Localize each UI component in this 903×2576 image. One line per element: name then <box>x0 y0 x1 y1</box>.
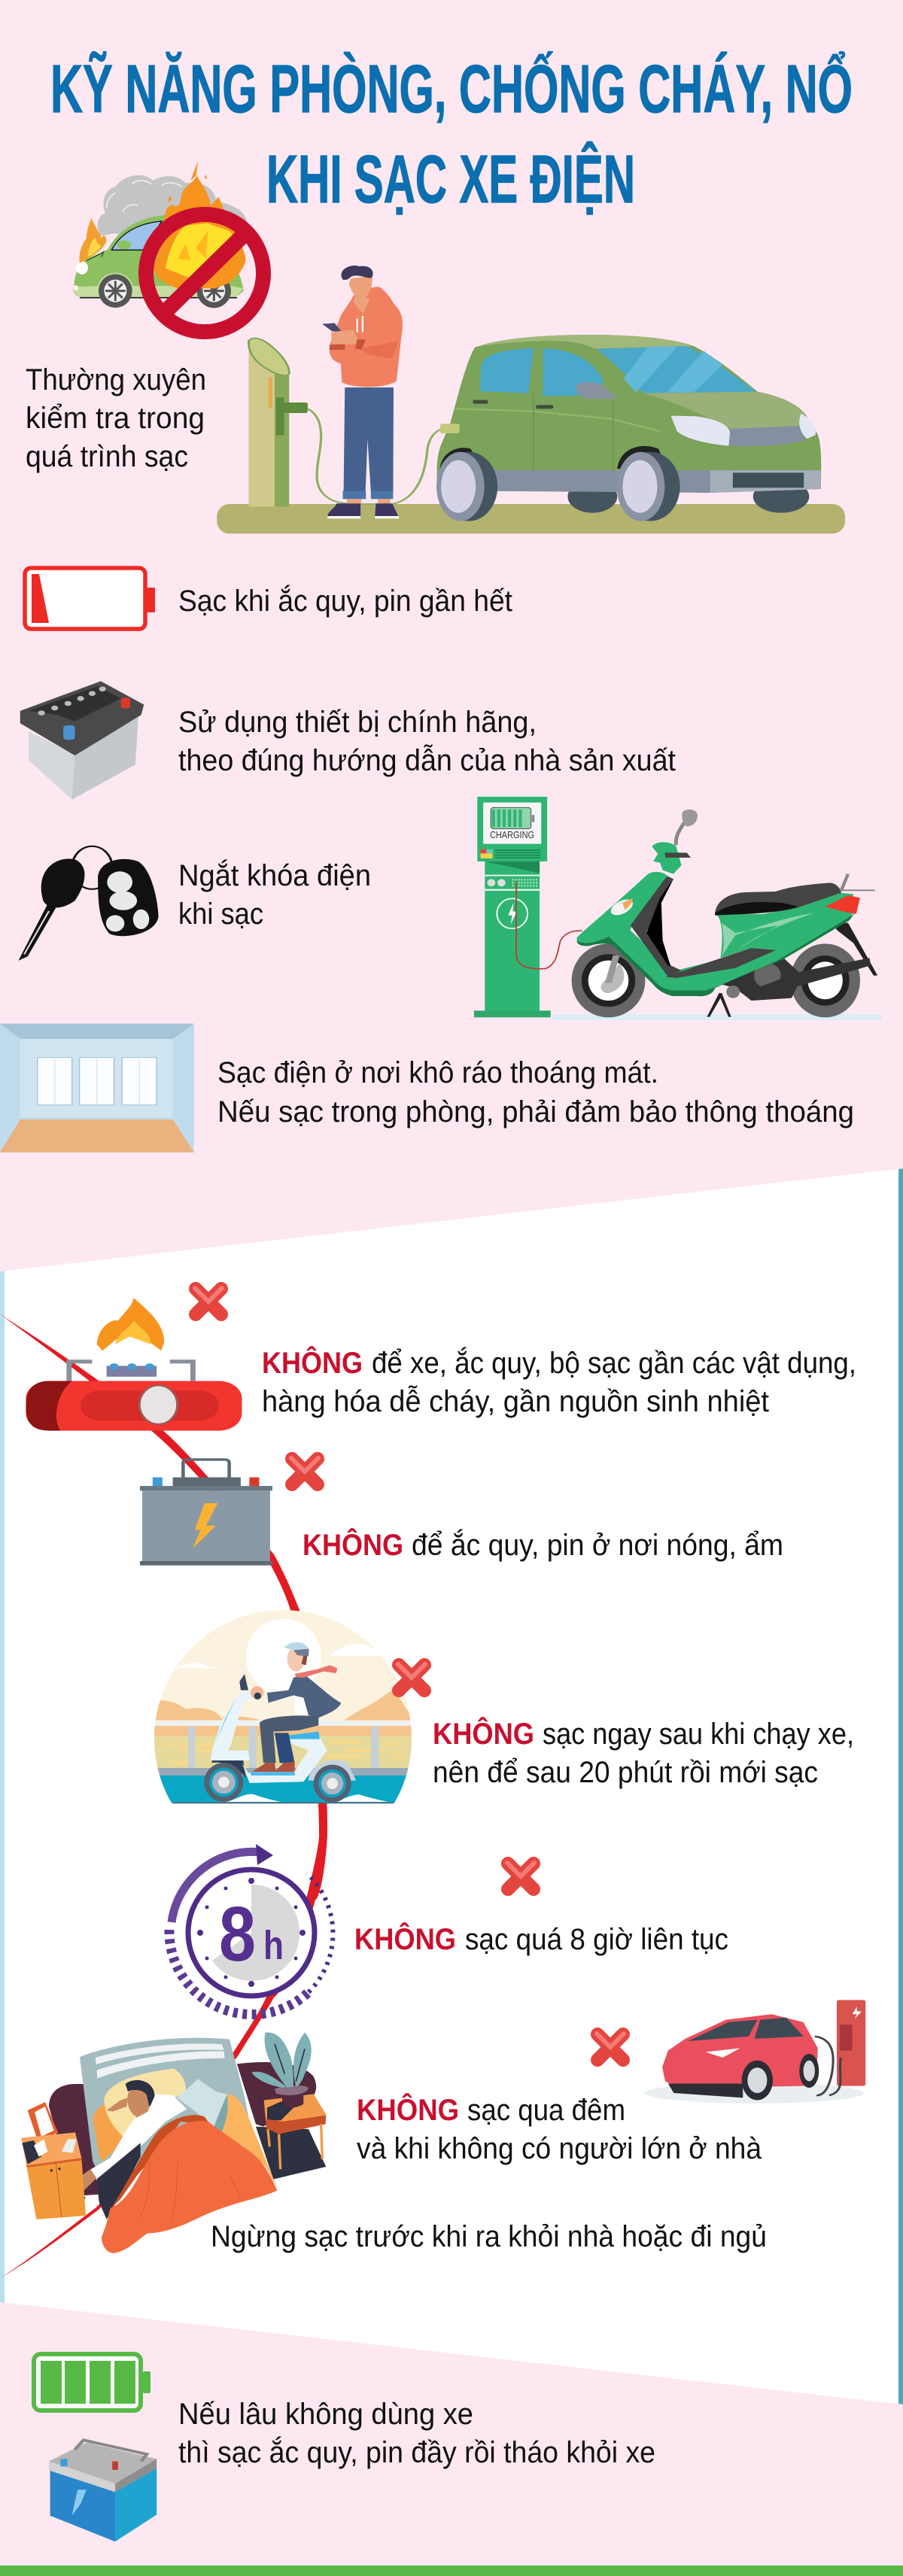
title <box>50 50 853 217</box>
text: not over 8 hours: sạc quá 8 giờ liên tục <box>465 1923 728 1956</box>
text: keep away from flammables: KHÔNG <box>262 1345 363 1380</box>
ground bar <box>217 504 845 533</box>
illustration: green charging station and scooter: CHARGING <box>490 829 534 840</box>
text: long storage advice: Nếu lâu không dùng xe <box>178 2398 473 2431</box>
charging station <box>474 797 582 1017</box>
text: genuine equipment: theo đúng hướng dẫn của nhà sản xuất <box>178 743 676 777</box>
illustration: red car charging <box>645 2000 865 2104</box>
bottom green band <box>0 2565 903 2576</box>
side table and plant <box>251 2032 327 2169</box>
nightstand <box>21 2102 86 2219</box>
text: keep away from flammables <box>262 1345 856 1418</box>
text: not over 8 hours <box>354 1921 728 1956</box>
text: do not charge after riding <box>433 1716 854 1789</box>
text: keep away from flammables: để xe, ắc quy, bộ sạc gần các vật dụng, <box>372 1346 856 1380</box>
text: genuine equipment: Sử dụng thiết bị chính hãng, <box>178 706 537 739</box>
text: regular checks: Thường xuyên <box>26 363 206 396</box>
charging post <box>248 339 442 506</box>
icon: 8 hour clock: h <box>263 1923 284 1968</box>
text: no hot or humid places: để ắc quy, pin ở nơi nóng, ẩm <box>412 1528 783 1562</box>
text: no overnight charging: và khi không có người lớn ở nhà <box>357 2132 762 2165</box>
scooter <box>572 810 877 1017</box>
red connector line <box>0 1314 327 2278</box>
icon: red cross 3 <box>398 1664 425 1690</box>
text: no overnight charging <box>357 2092 762 2165</box>
text: genuine equipment <box>178 706 676 777</box>
text: no overnight charging: sạc qua đêm <box>467 2094 625 2127</box>
text: dry ventilated place <box>217 1056 854 1129</box>
icon: car keys <box>18 846 158 961</box>
text: regular checks: quá trình sạc <box>26 440 188 473</box>
text: dry ventilated place: Nếu sạc trong phòng, phải đảm bảo thông thoáng <box>217 1095 854 1129</box>
text: charge when low: Sạc khi ắc quy, pin gần hết <box>178 584 512 618</box>
icon: blue battery <box>49 2440 157 2541</box>
text: do not charge after riding: nên để sau 20 phút rồi mới sạc <box>433 1756 818 1789</box>
text: switch off ignition <box>178 858 371 931</box>
icon: grey battery <box>140 1460 272 1566</box>
text: no hot or humid places: KHÔNG <box>303 1527 403 1562</box>
icon: red cross 4 <box>507 1863 534 1889</box>
text: switch off ignition: Ngắt khóa điện <box>178 858 371 892</box>
icon: red cross 5 <box>597 2034 624 2060</box>
icon: low battery <box>25 568 155 629</box>
text: long storage advice <box>178 2398 655 2469</box>
icon: 8 hour clock: 8 <box>219 1891 256 1977</box>
text: dry ventilated place: Sạc điện ở nơi khô ráo thoáng mát. <box>217 1056 658 1089</box>
text: do not charge after riding: KHÔNG <box>433 1716 534 1751</box>
text: do not charge after riding: sạc ngay sau khi chạy xe, <box>543 1718 854 1751</box>
title: KHI SẠC XE ĐIỆN <box>266 141 635 217</box>
text: stop charging before leaving: Ngừng sạc trước khi ra khỏi nhà hoặc đi ngủ <box>211 2220 767 2253</box>
illustration: man charging green car <box>217 266 845 533</box>
text: long storage advice: thì sạc ắc quy, pin đầy rồi tháo khỏi xe <box>178 2435 655 2469</box>
illustration: man sleeping in bed <box>21 2032 327 2253</box>
text: not over 8 hours: KHÔNG <box>354 1921 456 1956</box>
illustration: rider on scooter in circle <box>154 1610 412 1804</box>
text: regular checks <box>26 363 206 473</box>
text: keep away from flammables: hàng hóa dễ cháy, gần nguồn sinh nhiệt <box>262 1384 769 1418</box>
man with phone <box>322 266 403 518</box>
green car <box>436 335 821 521</box>
icon: red cross 2 <box>291 1458 318 1484</box>
icon: 8 hour clock <box>169 1844 333 2015</box>
text: regular checks: kiểm tra trong <box>26 402 205 435</box>
icon: gas stove with flame <box>26 1298 242 1431</box>
icon: car battery <box>20 681 144 800</box>
text: no overnight charging: KHÔNG <box>357 2092 459 2127</box>
icon: burning car with prohibition sign <box>72 160 263 332</box>
panel: white warnings section <box>0 1168 903 2404</box>
icon: red cross 1 <box>195 1288 222 1314</box>
illustration: ventilated room <box>0 1024 194 1153</box>
illustration: green charging station and scooter <box>474 797 882 1020</box>
text: switch off ignition: khi sạc <box>178 898 263 931</box>
icon: full green battery <box>34 2354 150 2410</box>
